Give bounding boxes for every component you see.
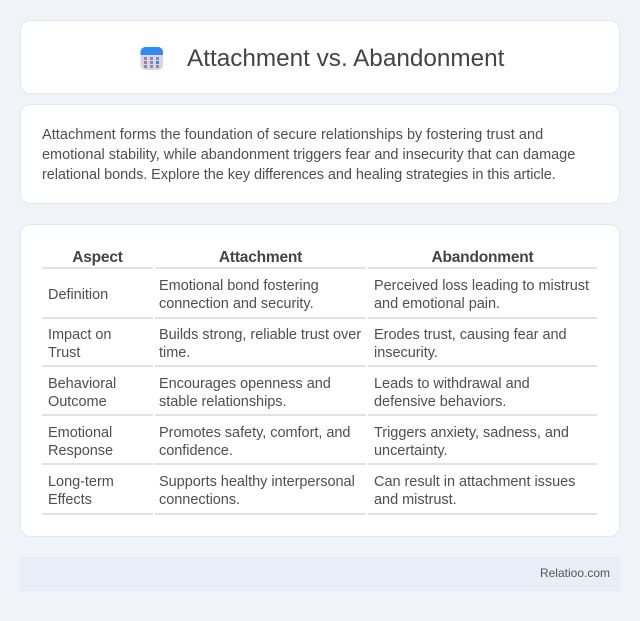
row: long-term effects: Effects (48, 492, 92, 508)
row: behavioral outcome: Outcome (48, 394, 107, 410)
footer bar (20, 557, 620, 591)
row: long-term effects: and mistrust. (374, 492, 457, 508)
intro paragraph: relational bonds. Explore the key differences and healing strategies in this article. (42, 167, 556, 183)
intro paragraph (42, 127, 575, 183)
row: emotional response: Emotional (48, 425, 112, 441)
row: behavioral outcome: defensive behaviors. (374, 394, 506, 410)
intro paragraph: emotional stability, while abandonment triggers fear and insecurity that can damage (42, 147, 575, 163)
row: definition: connection and security. (159, 296, 314, 312)
title: Attachment vs. Abandonment (187, 45, 504, 72)
row: behavioral outcome: Encourages openness and (159, 376, 331, 392)
row: impact on trust: insecurity. (374, 345, 438, 361)
row: impact on trust: Erodes trust, causing fear and (374, 327, 567, 343)
column headers: Attachment (219, 249, 302, 266)
row: behavioral outcome (48, 376, 530, 410)
row: emotional response: Triggers anxiety, sadness, and (374, 425, 569, 441)
row: impact on trust: Builds strong, reliable trust over (159, 327, 361, 343)
row: behavioral outcome: stable relationships. (159, 394, 287, 410)
row: behavioral outcome: Leads to withdrawal and (374, 376, 530, 392)
column headers: Aspect (72, 249, 123, 266)
row: emotional response: Response (48, 443, 113, 459)
row: long-term effects: Supports healthy interpersonal (159, 474, 355, 490)
column headers (72, 249, 534, 266)
row: long-term effects: Long-term (48, 474, 114, 490)
row: emotional response: confidence. (159, 443, 233, 459)
row: definition: and emotional pain. (374, 296, 500, 312)
row: emotional response (48, 425, 569, 459)
row: emotional response: uncertainty. (374, 443, 448, 459)
row: long-term effects: Can result in attachment issues (374, 474, 575, 490)
row: impact on trust: time. (159, 345, 190, 361)
row: behavioral outcome: Behavioral (48, 376, 116, 392)
row: impact on trust (48, 327, 567, 361)
title card (20, 20, 620, 94)
comparison table card (20, 224, 620, 537)
column headers: Abandonment (432, 249, 534, 266)
row: definition (48, 278, 589, 312)
row: impact on trust: Trust (48, 345, 80, 361)
row: definition: Perceived loss leading to mistrust (374, 278, 589, 294)
icon: calendar (140, 47, 163, 70)
intro text card (20, 104, 620, 204)
row: definition: Definition (48, 287, 108, 303)
row: emotional response: Promotes safety, comfort, and (159, 425, 350, 441)
row: long-term effects: connections. (159, 492, 240, 508)
row: definition: Emotional bond fostering (159, 278, 319, 294)
row: long-term effects (48, 474, 575, 508)
footer credit: Relatioo.com (540, 566, 610, 580)
row: impact on trust: Impact on (48, 327, 111, 343)
intro paragraph: Attachment forms the foundation of secure relationships by fostering trust and (42, 127, 543, 143)
